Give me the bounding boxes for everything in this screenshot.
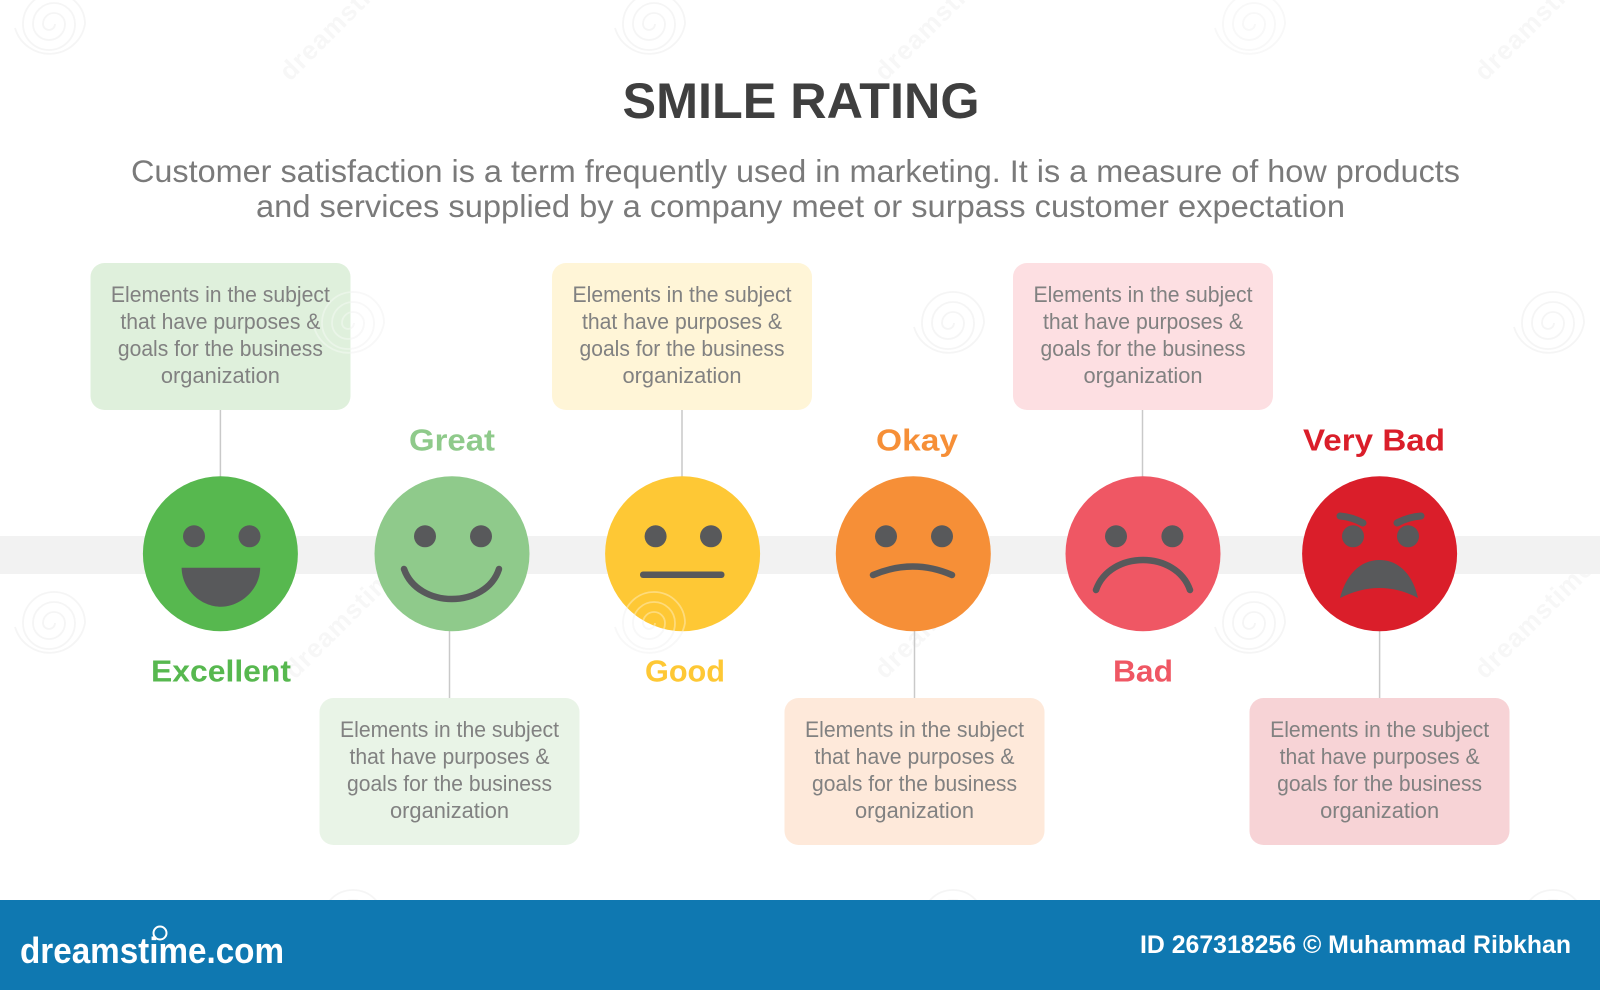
panel: bad description: organization xyxy=(1084,363,1202,388)
panel: very bad description: goals for the business xyxy=(1277,771,1482,796)
panel: bad description: Elements in the subject xyxy=(1034,282,1253,307)
panel: very bad description: that have purposes & xyxy=(1280,744,1480,769)
icon: excellent face xyxy=(143,476,298,631)
panel: good description: goals for the business xyxy=(580,336,784,361)
panel: good description: Elements in the subject xyxy=(572,282,792,307)
panel: good description: that have purposes & xyxy=(582,309,782,334)
label: good: Good xyxy=(645,654,725,688)
panel: great description: Elements in the subject xyxy=(340,717,560,742)
panel: very bad description: organization xyxy=(1320,798,1439,823)
panel: bad description: goals for the business xyxy=(1040,336,1246,361)
icon: great face xyxy=(374,476,530,631)
panel: great description: goals for the business xyxy=(347,771,552,796)
panel: excellent description: goals for the business xyxy=(118,336,323,361)
footer logo: dreamstime.com xyxy=(20,930,284,971)
timeline band xyxy=(0,536,1600,574)
text: dreamstime xyxy=(278,553,410,684)
text: dreamstime xyxy=(1468,553,1600,684)
panel: bad description: that have purposes & xyxy=(1043,309,1243,334)
icon: good face xyxy=(605,476,760,631)
panel: very bad description xyxy=(1250,630,1510,845)
icon: very bad face xyxy=(1302,476,1457,631)
footer credit: ID 267318256 © Muhammad Ribkhan xyxy=(1140,931,1571,959)
panel: great description: organization xyxy=(390,798,509,823)
subtitle text: Customer satisfaction is a term frequently used in marketing. It is a measure of how products xyxy=(131,153,1460,189)
label: bad: Bad xyxy=(1113,654,1173,688)
label: okay: Okay xyxy=(876,422,959,458)
footer bar xyxy=(0,900,1600,990)
panel: excellent description: Elements in the subject xyxy=(111,282,331,307)
label: great: Great xyxy=(409,422,495,458)
subtitle text: and services supplied by a company meet or surpass customer expectation xyxy=(256,188,1345,224)
panel: great description: that have purposes & xyxy=(350,744,550,769)
text: dreamstime xyxy=(868,553,1000,684)
panel: okay description xyxy=(784,630,1044,845)
panel: okay description: organization xyxy=(855,798,974,823)
title: SMILE RATING xyxy=(622,73,980,129)
panel: bad description xyxy=(1013,263,1273,477)
panel: very bad description: Elements in the subject xyxy=(1270,717,1490,742)
label: very bad: Very Bad xyxy=(1303,422,1445,458)
panel: good description xyxy=(552,263,812,477)
icon: okay face xyxy=(836,476,991,631)
panel: okay description: goals for the business xyxy=(812,771,1017,796)
panel: great description xyxy=(320,630,580,845)
icon: bad face xyxy=(1066,476,1220,631)
panel: excellent description: organization xyxy=(161,363,280,388)
panel: excellent description: that have purposes & xyxy=(120,309,320,334)
panel: good description: organization xyxy=(622,363,742,388)
label: excellent: Excellent xyxy=(151,654,291,688)
panel: okay description: that have purposes & xyxy=(814,744,1014,769)
subtitle text xyxy=(131,153,1460,224)
panel: okay description: Elements in the subject xyxy=(805,717,1025,742)
panel: excellent description xyxy=(90,263,350,477)
